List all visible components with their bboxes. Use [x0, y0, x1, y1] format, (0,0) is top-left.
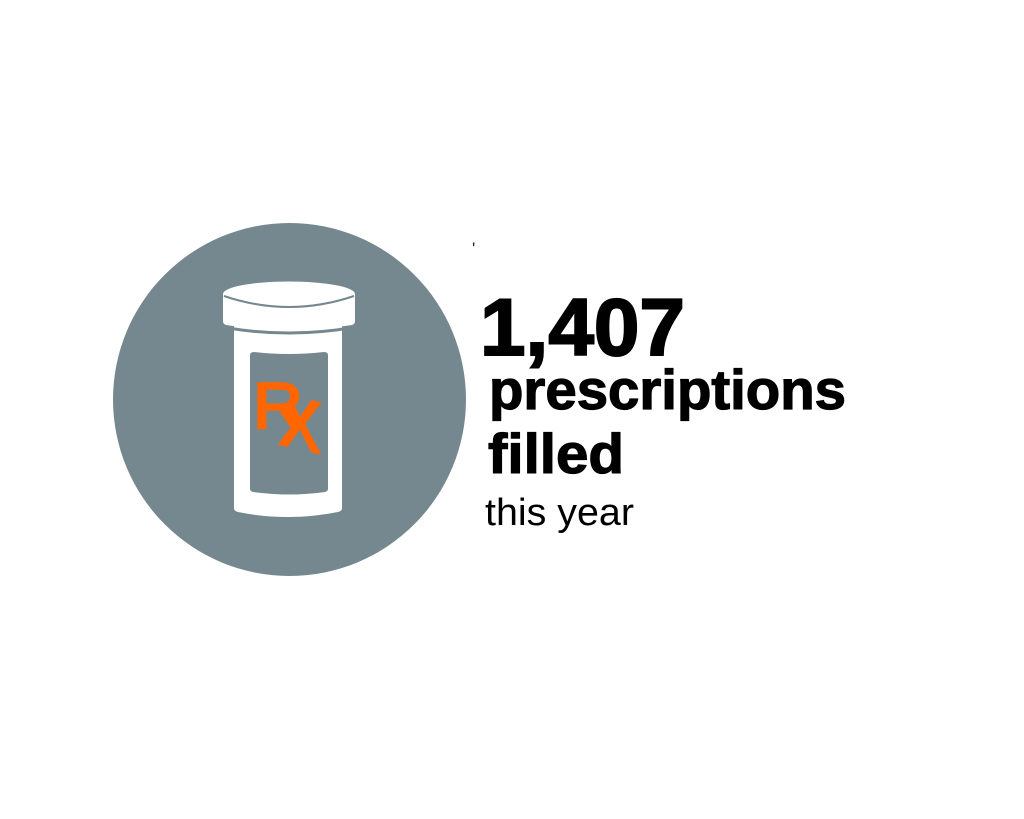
infographic [113, 223, 844, 576]
stray tick mark: ' [472, 239, 475, 258]
Rx symbol: R [253, 369, 303, 442]
bottle label [250, 352, 328, 494]
bottle lid [223, 294, 355, 330]
Rx symbol: x [278, 358, 323, 475]
caption: this year: this year [485, 492, 634, 534]
bottle body [234, 326, 342, 517]
statistic text [480, 283, 846, 534]
icon: prescription bottle in circle [113, 223, 466, 576]
Rx symbol [257, 382, 322, 455]
icon background circle [113, 223, 466, 576]
label: filled: filled [488, 422, 624, 485]
lid top [223, 282, 355, 306]
gap between lid and body [225, 326, 353, 334]
number: 1,407: 1,407 [480, 283, 685, 373]
label: prescriptions: prescriptions [489, 358, 846, 421]
lid rim line [224, 296, 354, 307]
